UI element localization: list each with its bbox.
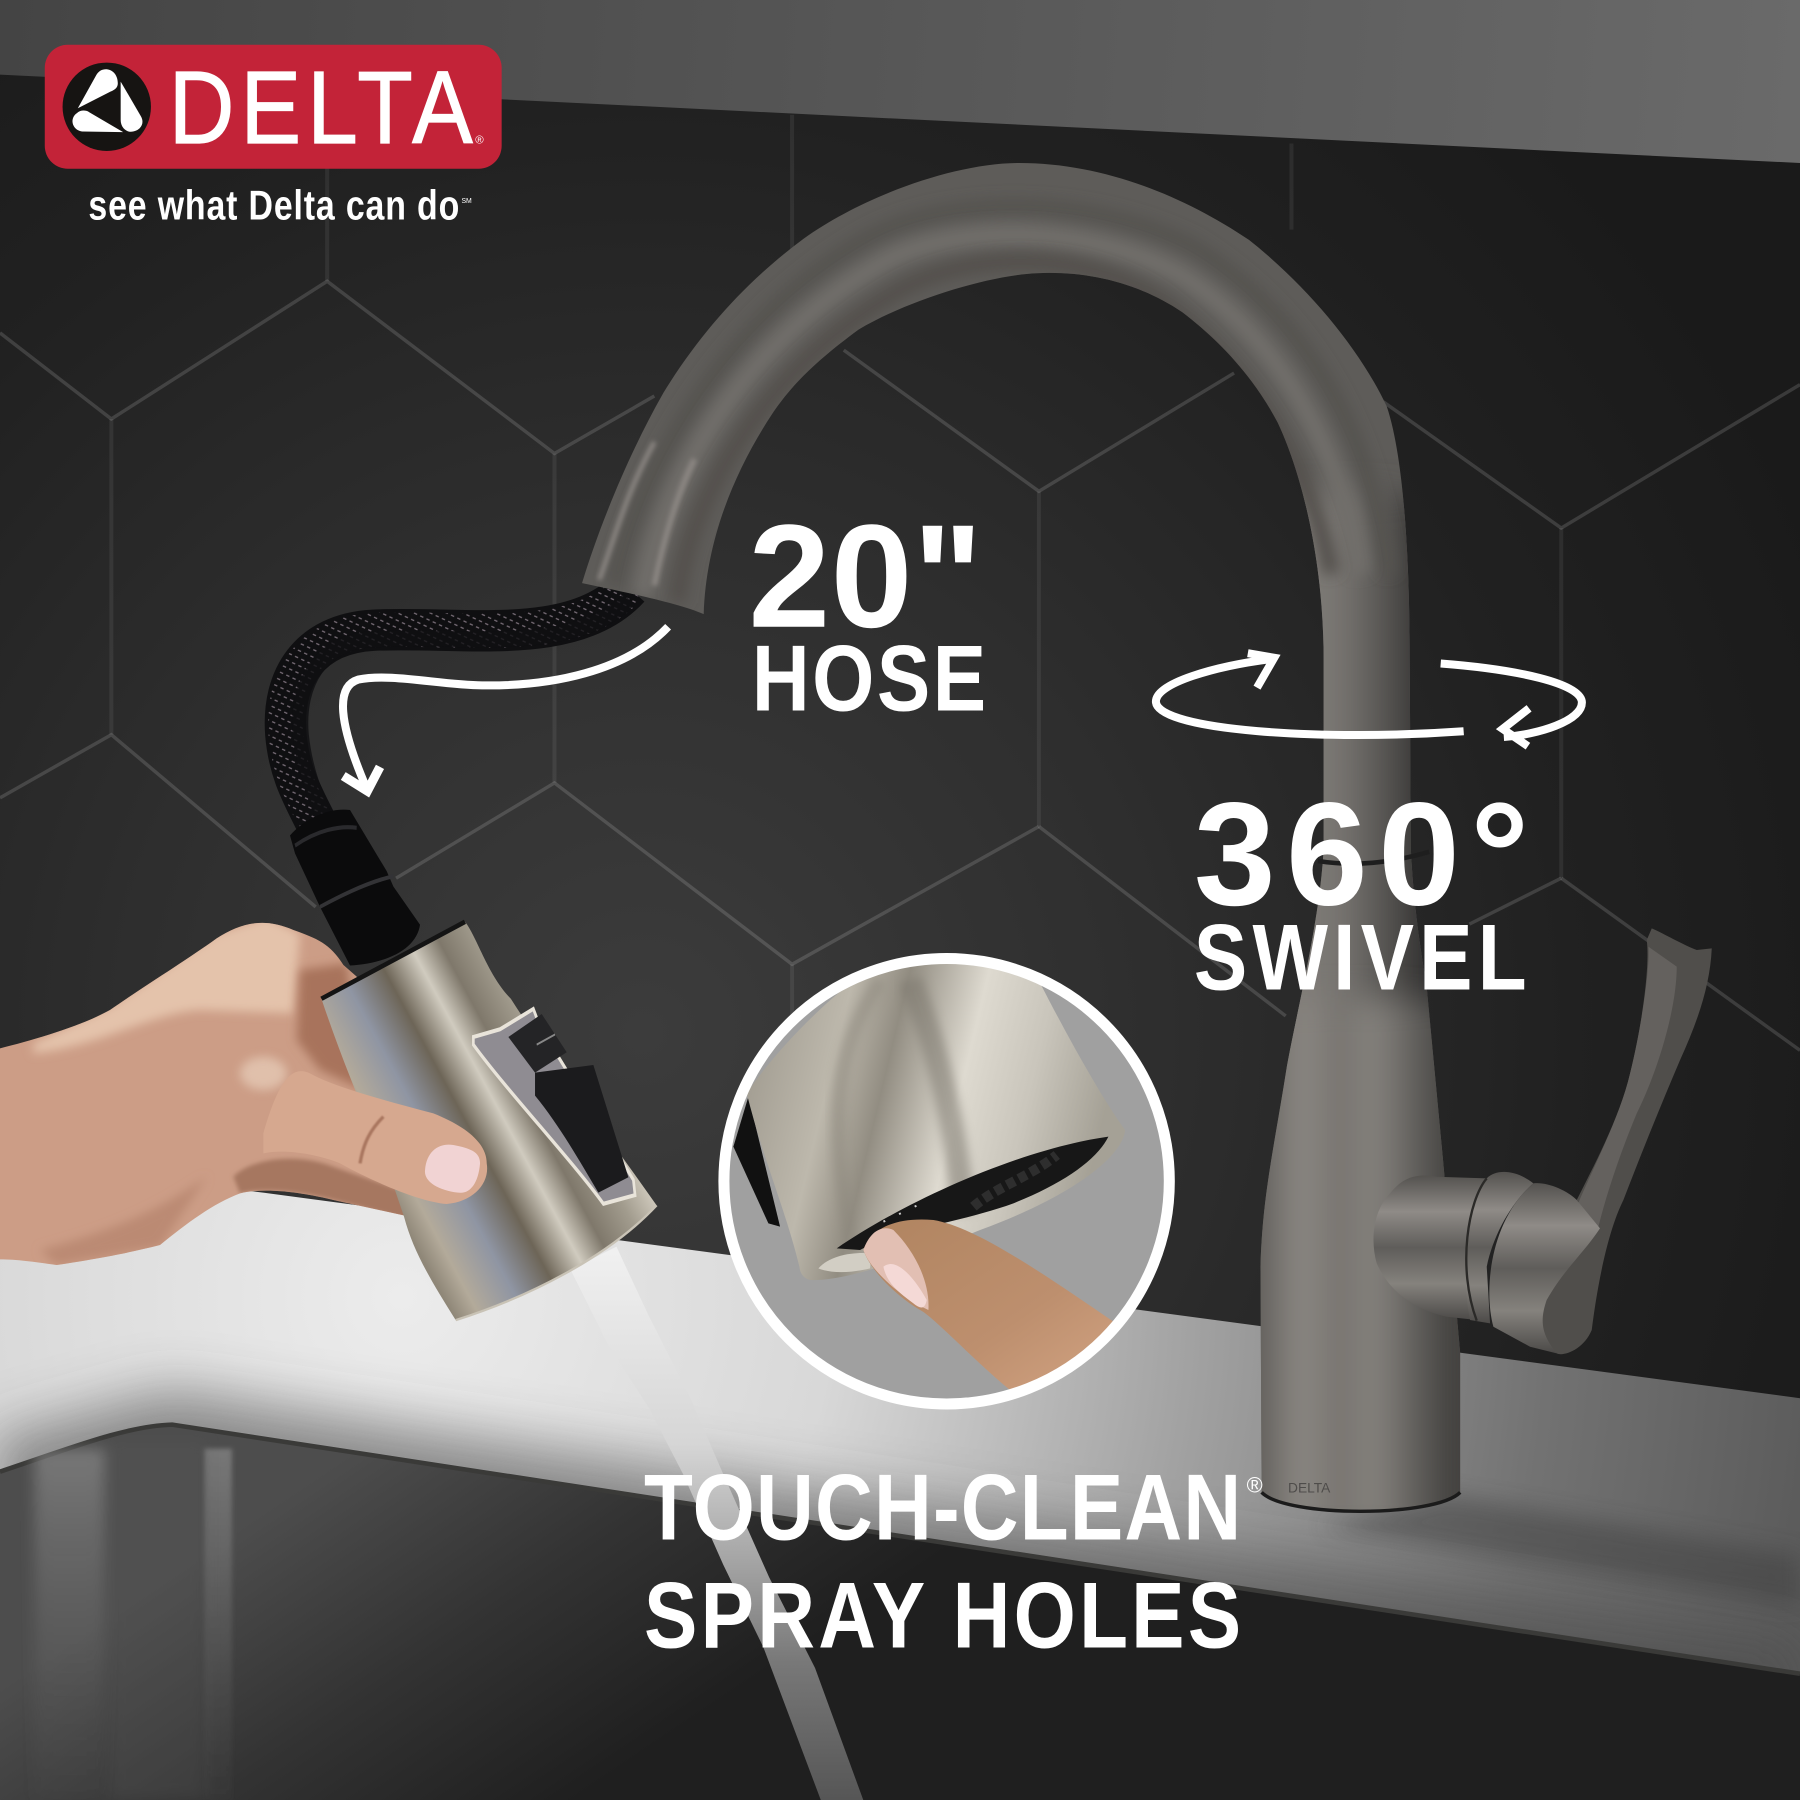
button cradle: [473, 1009, 635, 1204]
faucet handle: [1374, 928, 1712, 1354]
pull-down spray head assembly: [290, 810, 657, 1320]
callout: touch-clean spray holes: SPRAY HOLES: [644, 1562, 1241, 1668]
water stream: [571, 1247, 863, 1800]
inset fingertip: [863, 1219, 1113, 1390]
engraved brand on base: DELTA: [1288, 1480, 1331, 1495]
countertop: [0, 1191, 1800, 1672]
callout: touch-clean spray holes: TOUCH-CLEAN: [644, 1454, 1241, 1560]
faucet base shadow on counter: [1320, 1495, 1800, 1607]
hose length arrow: [343, 627, 668, 791]
swivel arrows: [1156, 653, 1582, 746]
spray head body: [321, 922, 657, 1320]
thumbnail: [425, 1145, 480, 1193]
tagline: see what Delta can do: [88, 183, 459, 229]
spray toggle button: [508, 1014, 628, 1193]
inset black button: [733, 1097, 780, 1227]
thumb: [263, 1071, 487, 1204]
logo wordmark: DELTA: [169, 50, 473, 165]
callout: 20 inch hose: HOSE: [752, 625, 986, 731]
Delta logo: ®: [475, 134, 484, 146]
callout: 360 swivel: 360°: [1194, 773, 1529, 937]
inset spray nozzle: [747, 963, 1125, 1280]
hand behind the spray head: [0, 917, 410, 1265]
callout: 20 inch hose: [748, 495, 986, 731]
top shelf band: [0, 0, 1800, 163]
handle lever: [1542, 928, 1712, 1354]
callout: touch-clean spray holes: [644, 1454, 1263, 1668]
logo badge: [45, 45, 502, 169]
callout: touch-clean spray holes: ®: [1247, 1472, 1263, 1497]
hose: [285, 588, 629, 829]
Delta logo: [45, 45, 502, 229]
inset circle: touch-clean spray holes: [723, 957, 1170, 1405]
logo emblem: [63, 63, 151, 151]
callout: 20 inch hose: 20": [748, 495, 983, 659]
Delta logo: SM: [461, 198, 472, 205]
connector collar: [290, 810, 420, 966]
faucet spout and body: [582, 163, 1481, 1538]
callout: 360 swivel: [1194, 773, 1529, 1010]
inset spray holes: [818, 1137, 1108, 1272]
callout: 360 swivel: SWIVEL: [1194, 904, 1527, 1010]
faucet: [582, 163, 1712, 1538]
sink basin: [0, 1425, 1800, 1800]
lit back of hand: [33, 917, 300, 1053]
